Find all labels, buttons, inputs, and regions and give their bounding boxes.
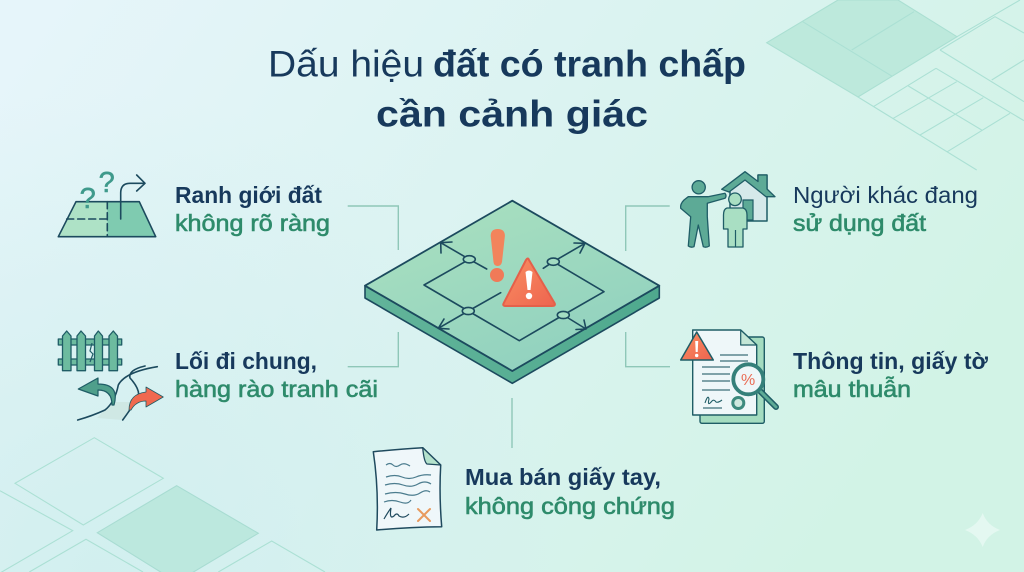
text: shared path and fence: Lối đi chung,	[175, 348, 317, 374]
text: someone else using the land: Người khác đang	[793, 182, 978, 208]
title	[268, 44, 746, 135]
title: cần cảnh giác	[376, 94, 648, 135]
text: shared path and fence	[175, 348, 378, 402]
text: handwritten sale without notarisation: Mua bán giấy tay,	[465, 464, 661, 490]
central land plot illustration	[365, 201, 659, 383]
item: boundary unclear	[58, 167, 330, 237]
text: conflicting documents: Thông tin, giấy tờ	[793, 348, 989, 374]
text: conflicting documents	[793, 348, 989, 402]
icon: people and house	[681, 172, 775, 247]
icon: plot with question marks: ?	[99, 167, 115, 199]
item: conflicting documents	[681, 330, 989, 423]
text: conflicting documents: mâu thuẫn	[793, 376, 911, 402]
plot slab	[365, 286, 659, 383]
icon: large exclamation mark	[490, 229, 505, 282]
item: handwritten sale without notarisation	[373, 448, 675, 530]
text: boundary unclear: không rõ ràng	[175, 210, 330, 236]
icon: documents, warning and magnifier	[681, 330, 776, 423]
text: someone else using the land: sử dụng đất	[793, 210, 927, 236]
icon: documents, warning and magnifier: %	[741, 372, 755, 389]
title: Dấu hiệu	[268, 44, 424, 85]
text: boundary unclear: Ranh giới đất	[175, 182, 322, 208]
item: someone else using the land	[681, 172, 978, 247]
text: someone else using the land	[793, 182, 978, 236]
text: boundary unclear	[175, 182, 330, 236]
connector lines	[348, 206, 670, 448]
icon: fence and forked path	[58, 331, 163, 420]
text: handwritten sale without notarisation	[465, 464, 675, 519]
boundary paths and arrows	[424, 242, 604, 341]
icon: plot with question marks: ?	[80, 183, 96, 215]
text: shared path and fence: hàng rào tranh cãi	[175, 376, 378, 402]
icon: plot with question marks	[58, 167, 156, 237]
decorative sparkle	[965, 513, 1000, 547]
icon: handwritten paper	[373, 448, 442, 530]
text: handwritten sale without notarisation: không công chứng	[465, 493, 675, 519]
item: shared path and fence	[58, 331, 378, 420]
decorative land parcels: top right	[767, 0, 1024, 170]
decorative land parcels: bottom left	[0, 438, 325, 572]
title: đất có tranh chấp	[433, 44, 746, 85]
icon: warning triangle	[503, 258, 555, 306]
